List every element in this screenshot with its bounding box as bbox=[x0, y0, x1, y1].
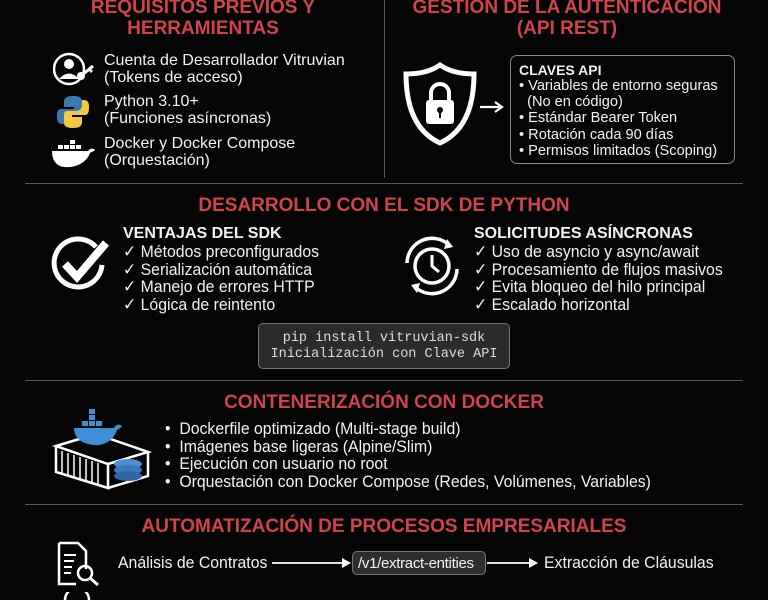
panel: solicitudes: ✓ Escalado horizontal bbox=[474, 294, 630, 314]
endpoint box bbox=[352, 551, 486, 575]
icon: python bbox=[56, 96, 89, 128]
text: python: Python 3.10+ bbox=[104, 93, 199, 110]
panel: requisitos list bbox=[52, 52, 345, 169]
callout: claves api: • Permisos limitados (Scoping) bbox=[519, 143, 717, 159]
text: cuenta bbox=[104, 52, 345, 86]
callout: claves api: • Variables de entorno seguras bbox=[519, 78, 718, 94]
panel: ventajas: VENTAJAS DEL SDK bbox=[123, 225, 282, 242]
callout: claves api: (No en código) bbox=[527, 94, 623, 110]
heading: requisitos bbox=[91, 0, 315, 39]
icon: check circle bbox=[52, 236, 109, 290]
endpoint box: /v1/extract-entities bbox=[358, 555, 474, 572]
callout: claves api: CLAVES API bbox=[519, 62, 601, 78]
list: docker bullets: • Dockerfile optimizado (Multi-stage build) bbox=[165, 419, 461, 438]
arrow bbox=[480, 101, 504, 113]
icon: async clock bbox=[405, 236, 459, 296]
icon: docker whale bbox=[52, 140, 95, 168]
text: docker: Docker y Docker Compose bbox=[104, 135, 295, 152]
panel: solicitudes: ✓ Procesamiento de flujos masivos bbox=[474, 260, 723, 278]
icon: container bbox=[52, 409, 152, 490]
text: python bbox=[104, 93, 271, 127]
arrow bbox=[487, 558, 538, 568]
text: extraccion: Extracción de Cláusulas bbox=[544, 553, 714, 572]
heading: requisitos: HERRAMIENTAS bbox=[127, 18, 279, 39]
panel: solicitudes: ✓ Evita bloqueo del hilo principal bbox=[474, 277, 705, 296]
panel: ventajas: ✓ Métodos preconfigurados bbox=[123, 242, 319, 261]
text: python: (Funciones asíncronas) bbox=[104, 110, 271, 127]
panel: solicitudes: SOLICITUDES ASÍNCRONAS bbox=[474, 225, 693, 242]
text: analisis: Análisis de Contratos bbox=[118, 553, 267, 572]
list: docker bullets: • Ejecución con usuario no root bbox=[165, 454, 388, 473]
panel: ventajas: ✓ Serialización automática bbox=[123, 260, 312, 278]
panel: ventajas: ✓ Manejo de errores HTTP bbox=[123, 277, 315, 296]
heading: sdk: DESARROLLO CON EL SDK DE PYTHON bbox=[198, 195, 570, 216]
icon: document search bbox=[58, 542, 99, 586]
text: docker bbox=[104, 135, 295, 169]
panel: ventajas bbox=[123, 225, 319, 314]
panel: ventajas: ✓ Lógica de reintento bbox=[123, 294, 275, 314]
icon: shield lock bbox=[404, 62, 476, 146]
list: docker bullets: • Orquestación con Docker Compose (Redes, Volúmenes, Variables) bbox=[165, 472, 651, 490]
callout: claves api: • Estándar Bearer Token bbox=[519, 110, 677, 126]
arrow bbox=[272, 558, 351, 568]
callout: claves api: • Rotación cada 90 días bbox=[519, 127, 673, 143]
heading: automatizacion: AUTOMATIZACIÓN DE PROCESOS EMPRESARIALES bbox=[142, 516, 626, 537]
icon: partial next bbox=[64, 592, 90, 600]
code box: pip install vitruvian-sdk bbox=[283, 331, 485, 346]
list: docker bullets bbox=[165, 419, 651, 490]
heading: docker: CONTENERIZACIÓN CON DOCKER bbox=[224, 392, 544, 413]
panel: solicitudes: ✓ Uso de asyncio y async/await bbox=[474, 242, 699, 261]
code box bbox=[258, 323, 510, 369]
panel: solicitudes bbox=[474, 224, 723, 314]
code box: Inicialización con Clave API bbox=[271, 347, 497, 362]
heading: autenticacion: (API REST) bbox=[517, 18, 617, 39]
text: cuenta: Cuenta de Desarrollador Vitruvian bbox=[104, 52, 345, 69]
text: docker: (Orquestación) bbox=[104, 152, 210, 169]
icon: user key bbox=[53, 52, 94, 86]
list: docker bullets: • Imágenes base ligeras (Alpine/Slim) bbox=[165, 436, 432, 456]
heading: autenticacion bbox=[413, 0, 721, 39]
callout: claves api bbox=[510, 55, 735, 164]
text: cuenta: (Tokens de acceso) bbox=[104, 69, 243, 86]
